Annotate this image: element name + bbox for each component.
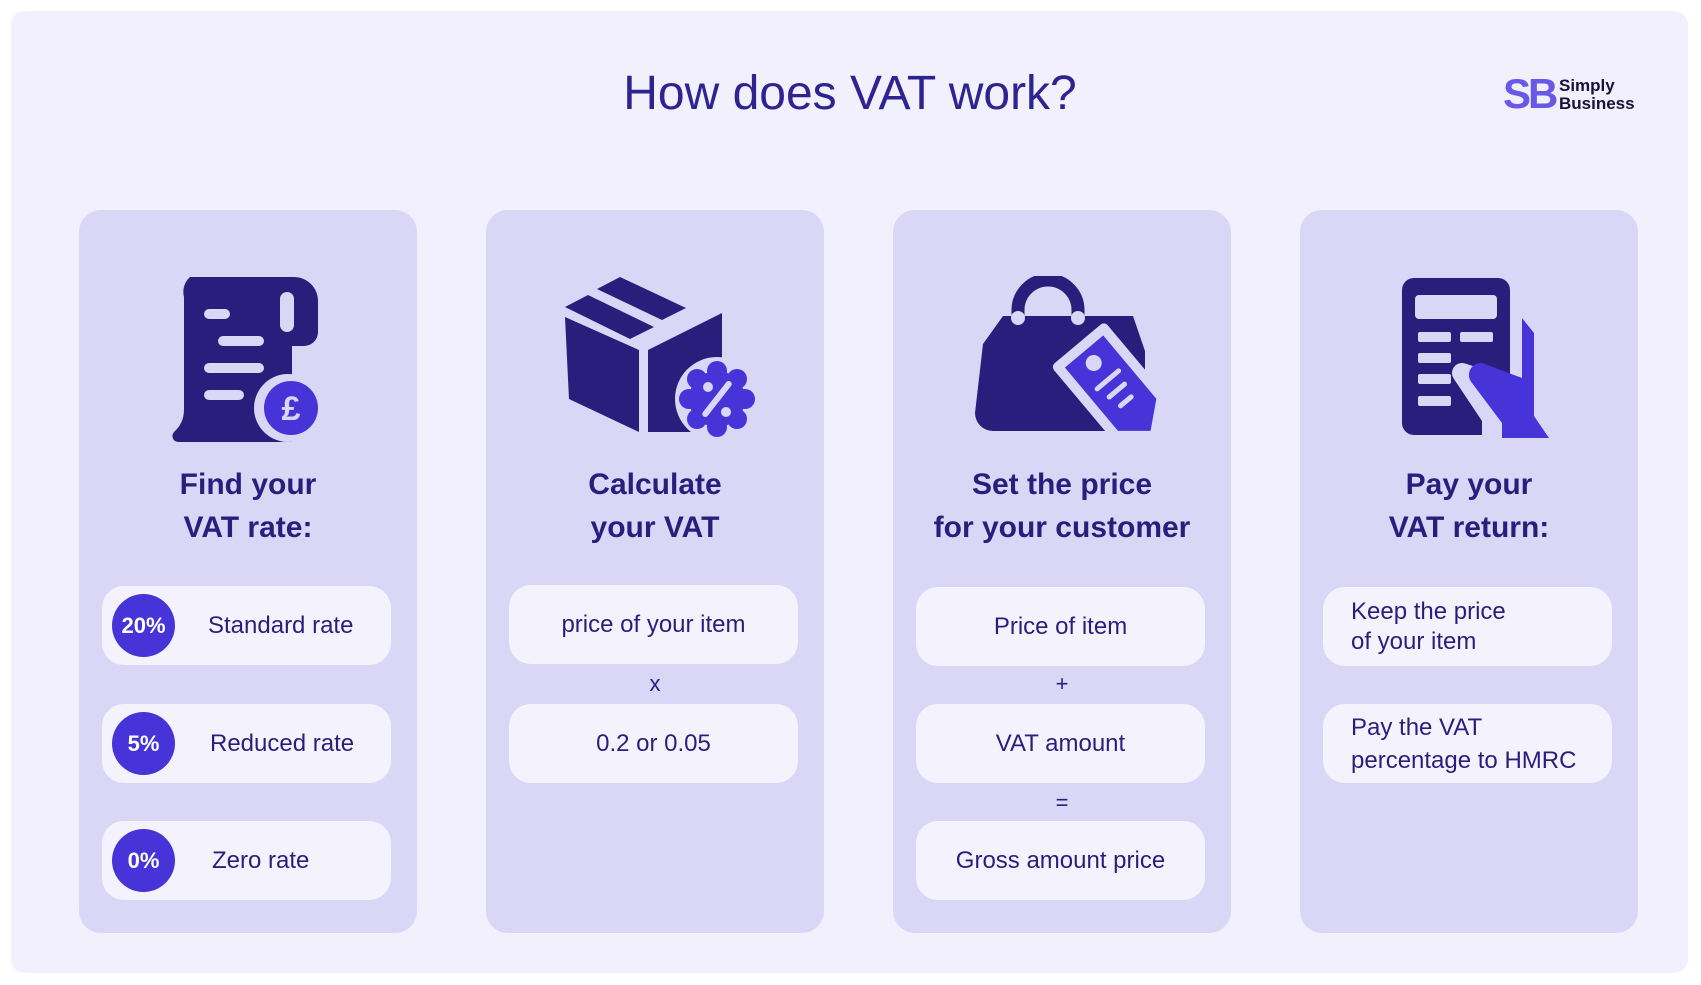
formula: price [509, 585, 798, 664]
operator +: + [1056, 671, 1068, 696]
operator x: x [650, 671, 660, 696]
heading: Calculate [588, 468, 722, 501]
formula: price: price of your item [561, 610, 746, 638]
rate: reduced [102, 704, 391, 783]
step: pay VAT: percentage to HMRC [1351, 746, 1576, 774]
logo: Simply [1559, 76, 1615, 95]
heading: Set the price [972, 468, 1152, 501]
heading [934, 468, 1190, 544]
heading: for your customer [934, 511, 1190, 544]
step: keep price: Keep the price [1351, 598, 1506, 624]
heading: your VAT [591, 511, 719, 544]
heading [588, 468, 722, 544]
formula: VAT amount [916, 704, 1205, 783]
rate: zero: 0% [128, 848, 159, 872]
panel: calculate your VAT [486, 210, 824, 933]
rate: standard: Standard rate [208, 612, 353, 638]
rate: reduced: Reduced rate [210, 730, 354, 756]
icon: bag with tag [975, 276, 1156, 431]
icon: calculator with hand [1402, 278, 1549, 438]
rate: reduced: 5% [128, 730, 159, 756]
formula: price of item [916, 587, 1205, 666]
title: How does VAT work? [623, 67, 1077, 120]
rate: standard: 20% [121, 612, 166, 638]
icon: receipt with pound: £ [282, 390, 301, 428]
formula: price of item: Price of item [994, 612, 1127, 640]
logo: Business [1559, 94, 1635, 113]
operator =: = [1056, 790, 1068, 815]
heading [1389, 468, 1549, 544]
formula: rate [509, 704, 798, 783]
formula: gross: Gross amount price [956, 846, 1165, 874]
step: pay VAT: Pay the VAT [1351, 714, 1482, 740]
rate: zero: Zero rate [212, 846, 309, 874]
heading: Pay your [1406, 468, 1532, 501]
heading [180, 468, 316, 544]
step: pay VAT [1323, 704, 1612, 783]
panel: set the price [893, 210, 1231, 933]
formula: VAT amount: VAT amount [996, 730, 1125, 756]
icon: receipt with pound [172, 277, 318, 442]
logo: SB [1503, 70, 1555, 117]
panel: pay your VAT return [1300, 210, 1638, 933]
panel: find your VAT rate [79, 210, 417, 933]
rate: standard [102, 586, 391, 665]
rate: zero [102, 821, 391, 900]
formula: rate: 0.2 or 0.05 [596, 730, 711, 756]
step: keep price: of your item [1351, 628, 1476, 654]
heading: Find your [180, 468, 316, 501]
formula: gross [916, 821, 1205, 900]
icon: box with percent [565, 277, 755, 437]
heading: VAT return: [1389, 511, 1549, 544]
step: keep price [1323, 587, 1612, 666]
heading: VAT rate: [184, 511, 312, 544]
logo [1503, 70, 1635, 117]
